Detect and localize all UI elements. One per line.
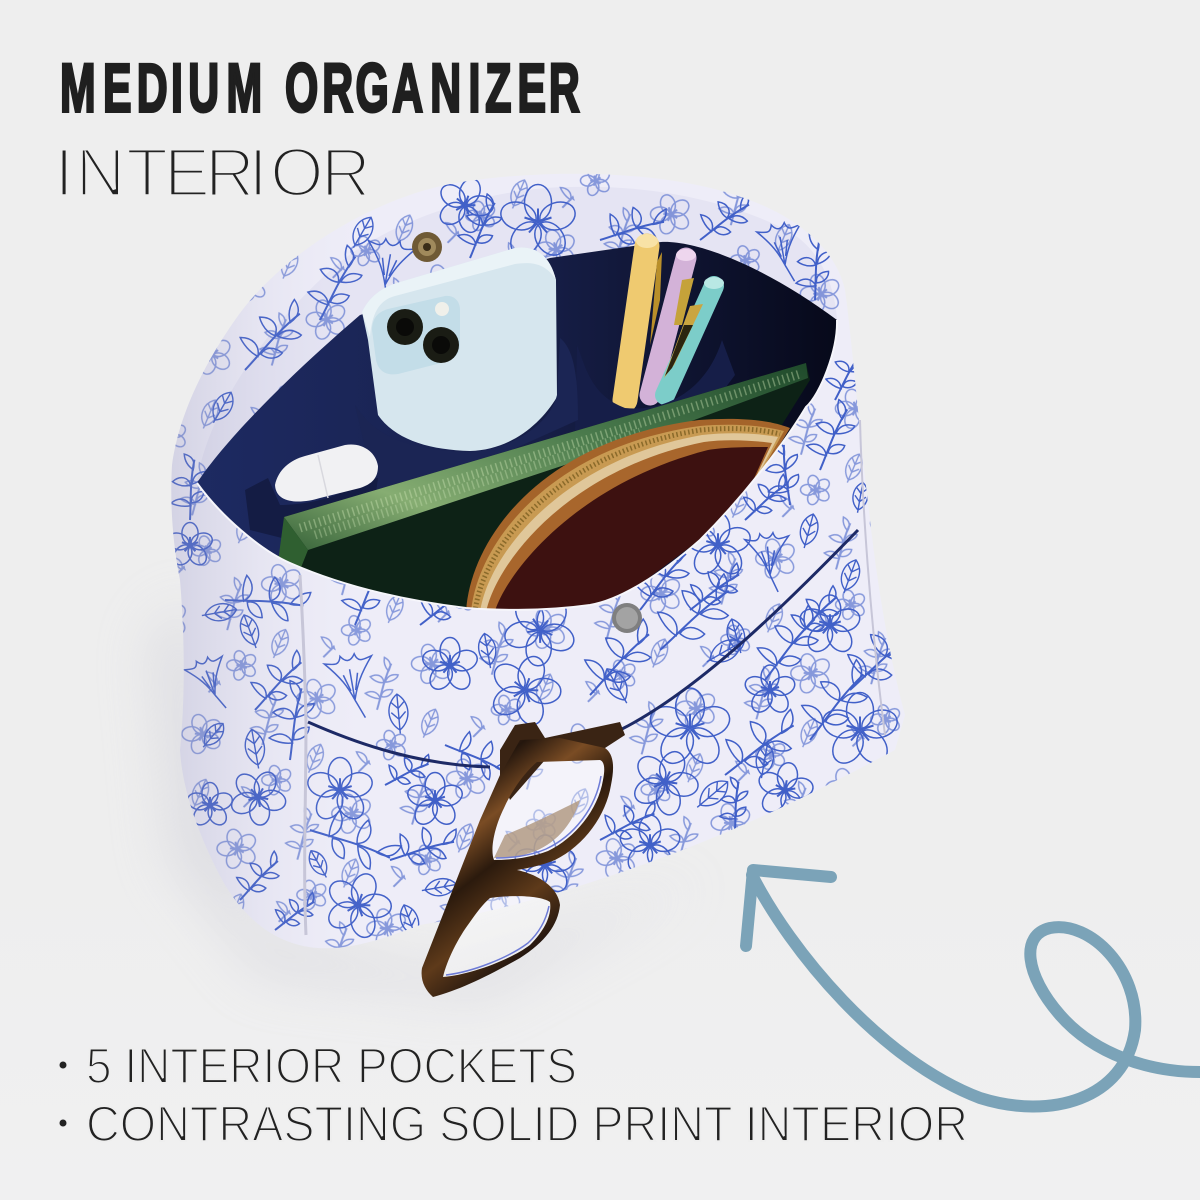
phone camera module bbox=[372, 296, 460, 374]
bag body bbox=[171, 174, 905, 948]
title bbox=[54, 50, 580, 211]
glasses frame bbox=[422, 738, 613, 997]
interior pockets and contents bbox=[245, 338, 810, 615]
pen: pink bbox=[650, 249, 696, 395]
pen pocket bbox=[586, 340, 735, 428]
phone bbox=[362, 247, 557, 451]
seams and pocket opening bbox=[300, 420, 885, 935]
green wallet bbox=[278, 363, 810, 615]
airpods case bbox=[275, 444, 378, 502]
glasses lens edge reflections bbox=[446, 776, 601, 975]
floral print bbox=[153, 169, 923, 960]
pen: yellow bbox=[625, 234, 662, 400]
title line: medium organizer: MEDIUM ORGANIZER bbox=[60, 50, 580, 127]
glasses lens tint bbox=[443, 760, 604, 977]
bullet: 5 interior pockets: 5 INTERIOR POCKETS bbox=[86, 1038, 577, 1094]
snap: bronze bbox=[412, 232, 442, 262]
front rim edge bbox=[197, 320, 837, 610]
title line: interior: INTERIOR bbox=[54, 134, 371, 211]
brown leather pouch bbox=[466, 419, 790, 614]
organizer bag bbox=[153, 169, 923, 960]
phone pocket bbox=[507, 338, 578, 450]
glasses temple arm bbox=[500, 722, 625, 800]
feature list bbox=[60, 1038, 968, 1152]
navy lining bbox=[197, 242, 837, 580]
arrow bbox=[746, 870, 1200, 1107]
snap: silver bbox=[612, 603, 642, 633]
bag shadow bbox=[150, 600, 700, 1000]
glasses tinted lens reflection bbox=[494, 800, 580, 858]
glasses bbox=[422, 722, 625, 997]
left pocket bbox=[245, 478, 378, 540]
pen: teal bbox=[664, 277, 724, 395]
bullet: contrasting solid print interior: CONTRASTING SOLID PRINT INTERIOR bbox=[86, 1096, 968, 1152]
